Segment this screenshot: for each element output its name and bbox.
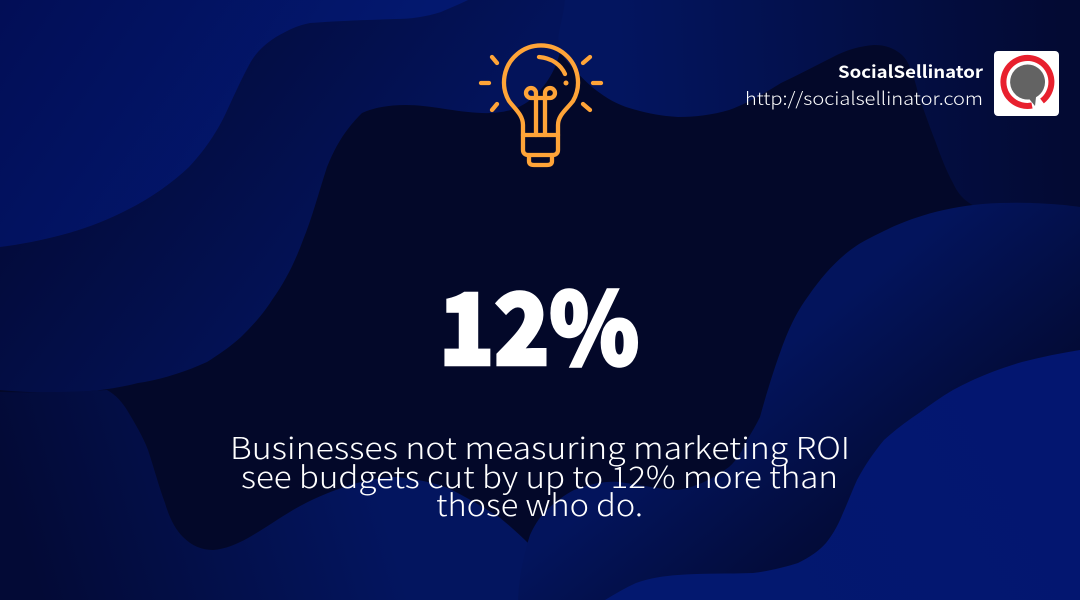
icon: light bulb	[481, 45, 601, 165]
logo speech bubble	[1010, 64, 1045, 106]
description line 3: those who do.	[436, 481, 643, 525]
logo ring	[1003, 58, 1051, 106]
bulb highlight dot	[564, 80, 568, 86]
big statistic: 12%	[439, 252, 639, 394]
brand url: http://socialsellinator.com	[745, 85, 983, 111]
description line 2: see budgets cut by up to 12% more than	[241, 453, 838, 497]
bulb screw tip	[529, 155, 552, 165]
bulb highlight	[539, 57, 565, 74]
background blob: bottom right mid layer	[518, 203, 1080, 600]
logo tile	[994, 51, 1059, 116]
background blob: bottom left layer	[0, 390, 530, 600]
background blob: top left bright layer	[0, 0, 468, 247]
bulb glass	[504, 45, 578, 135]
bulb light rays	[481, 57, 601, 110]
background blob: top left dark layer	[0, 0, 566, 392]
description	[230, 424, 850, 525]
background blob: bottom right bright layer	[605, 350, 1080, 600]
brand name: SocialSellinator	[838, 58, 984, 83]
logo	[994, 51, 1059, 116]
bulb filament	[526, 88, 555, 135]
background blob: top right layer	[558, 0, 1080, 207]
description line 1: Businesses not measuring marketing ROI	[230, 424, 850, 468]
bulb base	[523, 135, 558, 155]
